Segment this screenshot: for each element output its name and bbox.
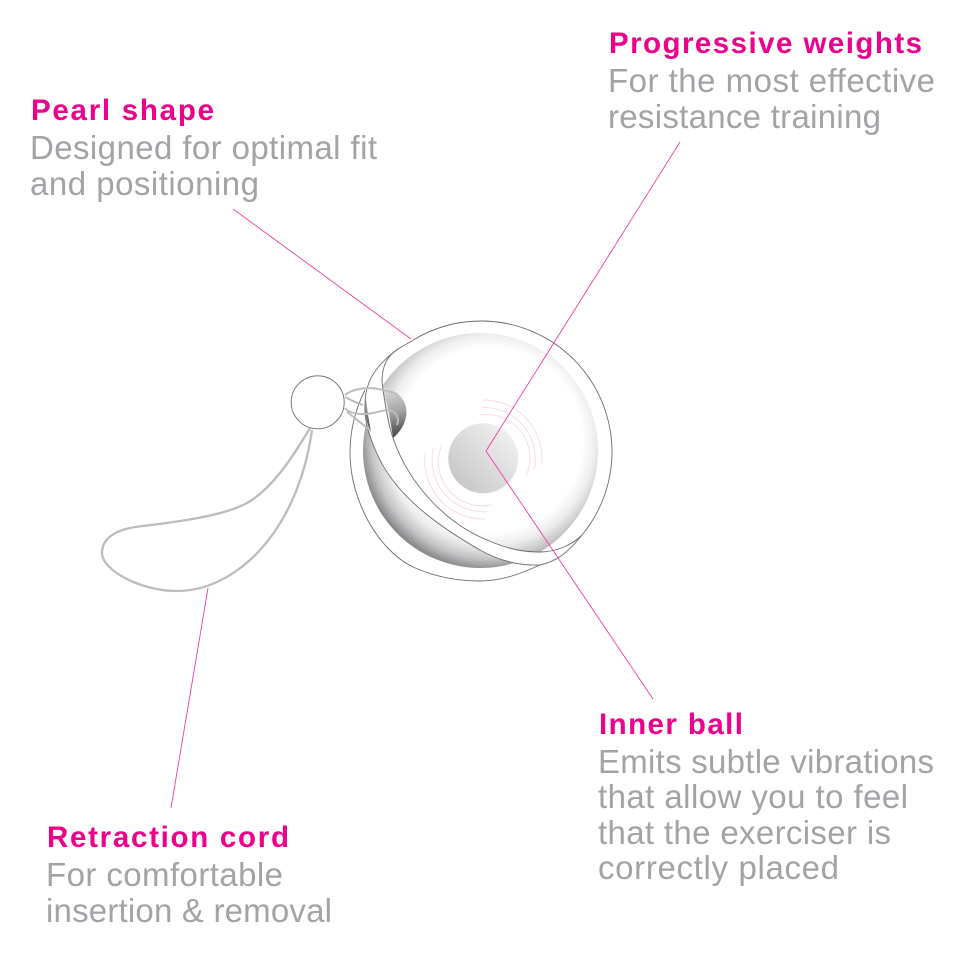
- callout: inner ball: that allow you to feel: [598, 778, 908, 815]
- outer pearl ball: [363, 333, 598, 568]
- inner dark knob: [383, 387, 407, 438]
- band and shell outlines: [350, 321, 612, 581]
- callout: progressive weights: [608, 27, 935, 135]
- illustration: pearl exerciser: [102, 321, 612, 591]
- callout: pearl shape: Designed for optimal fit: [30, 129, 377, 166]
- dark sliver: [365, 398, 371, 432]
- cord loops: [345, 388, 398, 430]
- callout: retraction cord: For comfortable: [46, 856, 283, 893]
- callout: pearl shape: [30, 94, 377, 202]
- callout: retraction cord: [46, 821, 332, 929]
- callout: pearl shape: and positioning: [30, 165, 259, 202]
- callout: progressive weights: For the most effective: [608, 62, 935, 99]
- callout: progressive weights: resistance training: [608, 98, 881, 135]
- callout: inner ball: that the exerciser is: [598, 814, 891, 851]
- callout: retraction cord: insertion & removal: [46, 892, 332, 929]
- callout: pearl shape: Pearl shape: [31, 94, 214, 127]
- callout: retraction cord: Retraction cord: [47, 821, 289, 854]
- inner ball: [448, 423, 518, 493]
- callout: inner ball: Emits subtle vibrations: [598, 743, 934, 780]
- small cord bead: [291, 376, 344, 429]
- callout: progressive weights: Progressive weights: [609, 27, 922, 60]
- callout: inner ball: Inner ball: [599, 708, 743, 741]
- retraction cord: [102, 428, 312, 591]
- white band: [365, 349, 582, 565]
- callout: inner ball: [598, 708, 934, 886]
- leader lines: [171, 142, 680, 808]
- callout: inner ball: correctly placed: [598, 849, 839, 886]
- vibration arcs: [425, 400, 542, 519]
